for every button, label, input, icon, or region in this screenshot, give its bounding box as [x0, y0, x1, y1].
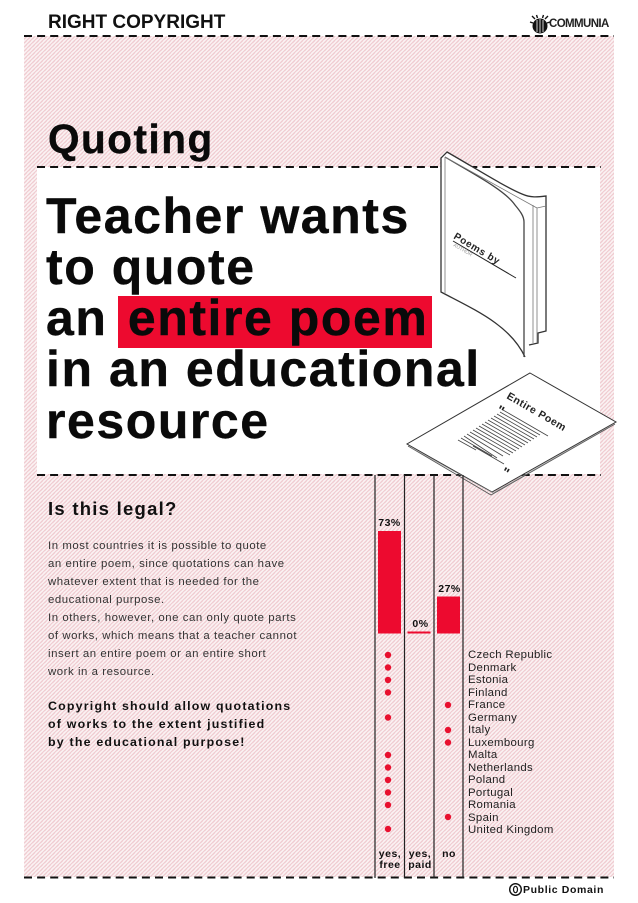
- country list: Netherlands: [468, 762, 533, 774]
- text: yes,: [409, 848, 431, 860]
- body text: In others, however, one can only quote parts: [48, 612, 296, 624]
- body text: educational purpose.: [48, 594, 165, 606]
- main title: in an educational: [46, 341, 481, 397]
- illustration: paper: Entire Poem: [504, 390, 568, 434]
- body text: work in a resource.: [48, 666, 155, 678]
- column labels: free: [379, 858, 401, 870]
- country list: Romania: [468, 799, 516, 811]
- illustration: paper: [407, 373, 616, 495]
- main title: to quote: [46, 239, 256, 295]
- conclusion text: Copyright should allow quotations: [48, 699, 291, 713]
- country list: France: [468, 699, 505, 711]
- illustration: paper: ": [494, 402, 507, 419]
- logo: Communia: COMMUNIA: [549, 18, 609, 30]
- text: paid: [408, 858, 432, 870]
- column labels: yes,: [379, 848, 401, 860]
- country list: Malta: [468, 749, 498, 761]
- conclusion text: of works to the extent justified: [48, 717, 265, 731]
- text: no: [442, 848, 456, 860]
- illustration: book: AUTHOR: [452, 243, 474, 258]
- column labels: [378, 848, 401, 870]
- body text: insert an entire poem or an entire short: [48, 648, 266, 660]
- country list: Czech Republic: [468, 649, 552, 661]
- main title: Teacher wants: [46, 188, 410, 244]
- subheading: Is this legal?: [48, 498, 178, 519]
- country list: Spain: [468, 812, 499, 824]
- illustration: paper: ": [498, 464, 512, 481]
- country list: [468, 649, 554, 836]
- country list: Germany: [468, 712, 517, 724]
- logo: Communia: [530, 14, 609, 34]
- body text: an entire poem, since quotations can have: [48, 558, 285, 570]
- main title: [46, 188, 481, 448]
- main title: resource: [46, 392, 270, 448]
- country list: Estonia: [468, 674, 508, 686]
- country list: Italy: [468, 724, 491, 736]
- body text: whatever extent that is needed for the: [48, 576, 260, 588]
- country list: United Kingdom: [468, 824, 554, 836]
- country list: Portugal: [468, 786, 513, 798]
- body text: of works, which means that a teacher cannot: [48, 630, 297, 642]
- text: 0%: [412, 618, 429, 630]
- public domain mark: Public Domain: [523, 884, 604, 896]
- country list: Poland: [468, 774, 505, 786]
- conclusion text: by the educational purpose!: [48, 735, 246, 749]
- bar labels: 73%: [378, 517, 401, 529]
- body text: [48, 540, 297, 678]
- section heading: Quoting: [48, 116, 214, 162]
- red highlight: [118, 296, 432, 348]
- country list: Finland: [468, 686, 508, 698]
- country list: Luxembourg: [468, 736, 535, 748]
- country list: Denmark: [468, 662, 517, 674]
- header label: RIGHT COPYRIGHT: [48, 12, 225, 33]
- text: 27%: [438, 583, 461, 595]
- conclusion text: [48, 699, 291, 749]
- main title: an entire poem: [46, 290, 428, 346]
- illustration: book: Poems by: [451, 231, 502, 267]
- body text: In most countries it is possible to quote: [48, 540, 267, 552]
